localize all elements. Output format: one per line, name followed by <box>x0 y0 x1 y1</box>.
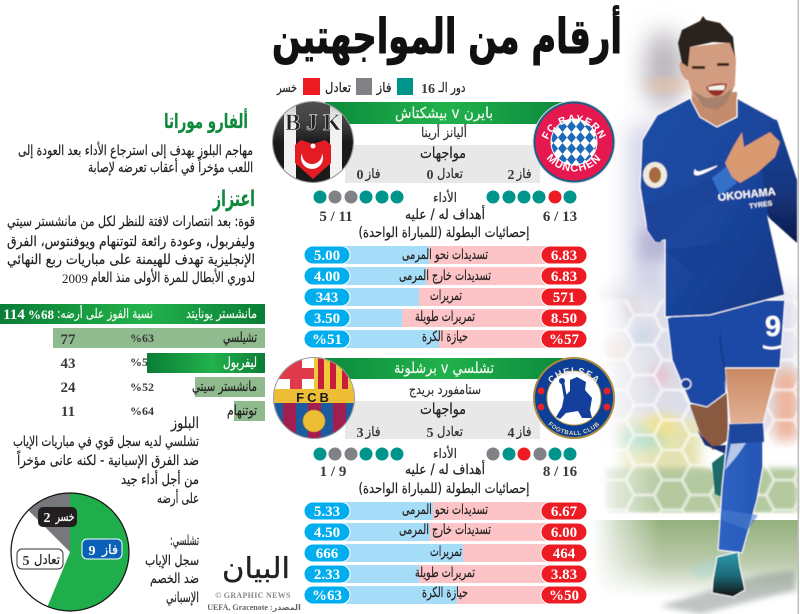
row: Man City: %52 <box>130 380 154 394</box>
legend: round of 16 label: دور الـ <box>438 81 466 96</box>
legend: loss swatch <box>303 78 320 95</box>
player photo <box>640 16 797 597</box>
match band <box>325 358 563 379</box>
draws <box>426 425 463 441</box>
Bayern crest <box>532 100 616 184</box>
wins away <box>356 425 380 441</box>
legend: draw swatch <box>356 78 372 95</box>
head to head box <box>345 401 540 439</box>
row: possession <box>304 585 587 604</box>
text block: Chelsea second leg: ضد الخصم <box>150 571 199 587</box>
legend: round of 16 label <box>421 81 466 97</box>
wins home: فاز <box>516 425 532 440</box>
label: draws <box>17 549 63 569</box>
row: shots off target: تسديدات خارج المرمى <box>399 522 491 538</box>
body text: ضد الفرق الإسبانية - لكنه عانى مؤخراً <box>17 450 199 469</box>
Bayern crest: MUNCHEN <box>546 154 600 172</box>
player: hand and cuff <box>712 132 780 195</box>
row: passes: 343 <box>316 290 338 306</box>
body text <box>13 434 199 507</box>
wins away: فاز <box>365 425 380 440</box>
goals Bayern: 6 / 13 <box>543 209 577 225</box>
row: shots off target: تسديدات خارج المرمى <box>399 268 491 284</box>
match title: بايرن v بيشكتاش <box>395 104 493 122</box>
goals label: أهداف له / عليه <box>405 460 485 478</box>
row: Man City: 24 <box>60 380 76 396</box>
wins home: 4 <box>508 426 514 441</box>
body text: تشلسي لديه سجل قوي في مباريات الإياب <box>13 434 199 450</box>
match band <box>325 102 563 124</box>
row: Tottenham: 11 <box>61 404 75 420</box>
row: Liverpool: 43 <box>60 356 76 372</box>
body text: من أجل أداء جيد <box>121 470 199 488</box>
draws: تعادل <box>437 167 463 182</box>
body text: مهاجم البلوز يهدف إلى استرجاع الأداء بعد العودة إلى <box>18 141 253 159</box>
legend: round of 16 label: 16 <box>421 82 435 97</box>
body text: اللعب مؤخراً في أعقاب تعرضه لإصابة <box>88 157 253 176</box>
label: wins: 9 <box>88 544 96 559</box>
stats heading: إحصائيات البطولة (للمباراة الواحدة) <box>358 225 530 241</box>
panel: the Blues note <box>13 414 199 507</box>
row: shots on target: تسديدات نحو المرمى <box>402 502 488 518</box>
draws: 5 <box>426 426 434 441</box>
header row: مانشستر يونايتد <box>186 307 257 322</box>
row: passes: 666 <box>316 546 339 562</box>
player: shirt <box>640 98 797 317</box>
body text: على أرضه <box>157 489 199 507</box>
row: Chelsea <box>53 328 265 348</box>
match title: تشلسي v برشلونة <box>394 359 494 378</box>
row: passes: 571 <box>553 290 575 306</box>
row: long passes: تمريرات طويلة <box>415 309 475 325</box>
label: draws: 5 <box>22 554 30 569</box>
label: draws: تعادل <box>34 553 60 568</box>
Barcelona crest <box>272 356 356 439</box>
stat rows Bayern v Besiktas <box>304 246 587 348</box>
body text: الإنجليزية تهدف للهيمنة على مباريات ربع النهائي <box>7 252 255 268</box>
goals Besiktas: 5 / 11 <box>319 209 353 225</box>
row: shots on target: 6.67 <box>551 504 578 520</box>
premier league badge <box>643 162 667 188</box>
table: home win rate <box>0 304 265 421</box>
wins home <box>508 167 532 183</box>
row: passes <box>304 544 587 562</box>
row: Chelsea: 77 <box>60 332 76 348</box>
Chelsea crest: CHELSEA <box>548 367 598 383</box>
stat rows Chelsea v Barcelona <box>304 502 587 604</box>
sponsor text: OKOHAMA <box>717 186 776 204</box>
slice: wins <box>47 493 129 611</box>
header row: 114 <box>3 307 25 323</box>
Bayern crest: FC BAYERN <box>542 114 606 140</box>
row: Man City: مانشستر سيتي <box>192 379 257 395</box>
form dots Bayern <box>486 190 576 204</box>
row: Tottenham: توتنهام <box>227 403 257 419</box>
row: long passes: 8.50 <box>551 311 577 327</box>
draws: تعادل <box>437 425 463 440</box>
row: Man City <box>60 377 265 397</box>
title: أرقام من المواجهتين <box>272 5 622 65</box>
Barcelona crest: FCB <box>296 390 332 405</box>
stats heading: إحصائيات البطولة (للمباراة الواحدة) <box>358 481 530 497</box>
heading: اعتزاز <box>212 187 255 212</box>
Chelsea crest: FOOTBALL CLUB <box>548 422 599 435</box>
row: long passes <box>304 309 587 327</box>
row: shots off target <box>304 267 587 285</box>
stadium: ستامفورد بريدج <box>409 383 481 398</box>
row: long passes: تمريرات طويلة <box>415 565 475 581</box>
row: passes: 464 <box>553 546 576 562</box>
row: Chelsea: تشيلسي <box>223 330 257 346</box>
row: possession: %63 <box>312 588 342 604</box>
page edge <box>798 0 799 614</box>
panel: Chelsea v Barcelona <box>273 357 615 604</box>
body text: لدوري الأبطال للمرة الأولى منذ العام <box>91 268 255 286</box>
legend <box>276 78 466 97</box>
form label: الأداء <box>433 189 457 206</box>
row: Liverpool: %59 <box>130 355 154 369</box>
body text: قوة: بعد انتصارات لافتة للنظر لكل من مانشستر سيتي <box>7 214 255 230</box>
row: Tottenham <box>61 401 265 421</box>
body text: وليفربول، وعودة رائعة لتوتنهام ويوفنتوس، الفرق <box>7 234 255 250</box>
player: right sleeve <box>762 118 797 243</box>
row: shots off target: 4.00 <box>314 269 340 285</box>
panel: Alvaro Morata profile <box>18 107 253 176</box>
wins away: 3 <box>356 426 364 441</box>
row: possession: %51 <box>312 332 342 348</box>
text block: Chelsea second leg: الإسباني <box>166 590 199 606</box>
row: shots off target: 4.50 <box>314 525 340 541</box>
row: passes: تمريرات <box>430 544 462 560</box>
player: shorts <box>667 300 785 407</box>
row: shots on target: 5.00 <box>314 248 340 264</box>
row: Liverpool <box>60 353 265 373</box>
goals Chelsea: 8 / 16 <box>543 464 578 480</box>
row: possession <box>304 329 587 348</box>
player: boot <box>712 552 745 597</box>
panel: pride <box>7 187 255 286</box>
row: possession: %50 <box>549 588 579 604</box>
row: possession: %57 <box>549 332 580 348</box>
head to head box <box>345 145 540 183</box>
wins home <box>508 425 532 441</box>
form dots Besiktas <box>314 190 404 204</box>
wins home: 2 <box>508 168 514 183</box>
form label: الأداء <box>433 445 457 462</box>
Besiktas crest: BJK <box>285 110 341 135</box>
label: losses: 2 <box>44 511 50 526</box>
nike swoosh <box>694 166 717 175</box>
legend: draw label: تعادل <box>325 81 351 96</box>
row: shots on target <box>304 246 587 264</box>
row: Tottenham: %64 <box>130 404 154 418</box>
player: back leg and boot <box>690 393 728 497</box>
wins away: فاز <box>365 167 380 182</box>
legend: win label: فاز <box>376 81 392 96</box>
row: shots on target: 5.33 <box>314 504 340 520</box>
body text <box>18 141 253 176</box>
row: passes: تمريرات <box>430 288 462 304</box>
row: passes <box>304 288 587 306</box>
label: wins: فاز <box>101 543 118 558</box>
Chelsea crest <box>533 357 615 439</box>
draws: 0 <box>426 168 434 183</box>
panel: Bayern v Besiktas <box>272 100 616 348</box>
goals label: أهداف له / عليه <box>405 205 485 223</box>
player: neck and face <box>680 42 737 127</box>
heading: ألفارو موراتا <box>164 107 248 133</box>
legend: win swatch <box>397 78 413 95</box>
head to head heading: مواجهات <box>420 144 466 162</box>
row: long passes: 3.83 <box>551 567 577 583</box>
wins home: فاز <box>516 167 532 182</box>
header row: نسبة الفوز على أرضه: <box>57 305 153 322</box>
body text: 2009 <box>62 271 88 286</box>
row: possession: حيازة الكرة <box>422 585 468 601</box>
row: long passes: 3.50 <box>314 311 340 327</box>
head to head heading: مواجهات <box>420 400 466 418</box>
slice: draws <box>11 510 70 606</box>
Besiktas crest <box>272 100 354 184</box>
pie chart: Chelsea second-leg record <box>11 493 129 611</box>
shirt number 9: 9 <box>765 311 781 343</box>
stadium: أليانز أرينا <box>421 124 467 141</box>
wins away <box>356 167 380 183</box>
label: losses: خسر <box>55 510 74 525</box>
text block: Chelsea second leg <box>145 533 199 606</box>
player: front leg <box>718 368 777 553</box>
draws <box>426 167 463 183</box>
row: shots off target: 6.00 <box>551 525 577 541</box>
wins away: 0 <box>356 168 364 183</box>
header row: %68 <box>28 307 54 322</box>
legend: loss label: خسر <box>276 81 297 96</box>
player: hair <box>678 16 735 67</box>
row: possession: حيازة الكرة <box>422 329 468 345</box>
form dots Barcelona <box>314 448 404 460</box>
row: shots on target: 6.83 <box>551 248 577 264</box>
row: long passes <box>304 565 587 583</box>
credit: source: المصدر: UEFA, Gracenote <box>207 603 301 612</box>
player: shirt: TYRES <box>749 200 773 211</box>
text block: Chelsea second leg: سجل الإياب <box>145 553 199 569</box>
photo background: stadium and goal net <box>580 30 798 614</box>
heading: البلوز <box>170 414 199 432</box>
text block: Chelsea second leg: تشلسي: <box>170 533 199 549</box>
row: shots off target <box>304 522 587 541</box>
row: shots on target: تسديدات نحو المرمى <box>402 247 488 263</box>
row: shots off target: 6.83 <box>551 269 577 285</box>
row: shots on target <box>304 502 587 520</box>
form dots Chelsea <box>486 448 576 460</box>
goals Barcelona: 1 / 9 <box>320 464 346 480</box>
label: losses <box>38 507 77 527</box>
body text <box>7 214 255 286</box>
row: long passes: 2.33 <box>314 567 340 583</box>
row: Liverpool: ليفربول <box>223 355 257 371</box>
credit: Graphic News: © GRAPHIC NEWS <box>215 591 291 600</box>
label: wins <box>82 539 122 559</box>
header row <box>0 304 265 324</box>
row: Chelsea: %63 <box>130 331 154 345</box>
logo: Al Bayan: البيان <box>222 551 290 585</box>
slice: losses <box>28 493 70 552</box>
